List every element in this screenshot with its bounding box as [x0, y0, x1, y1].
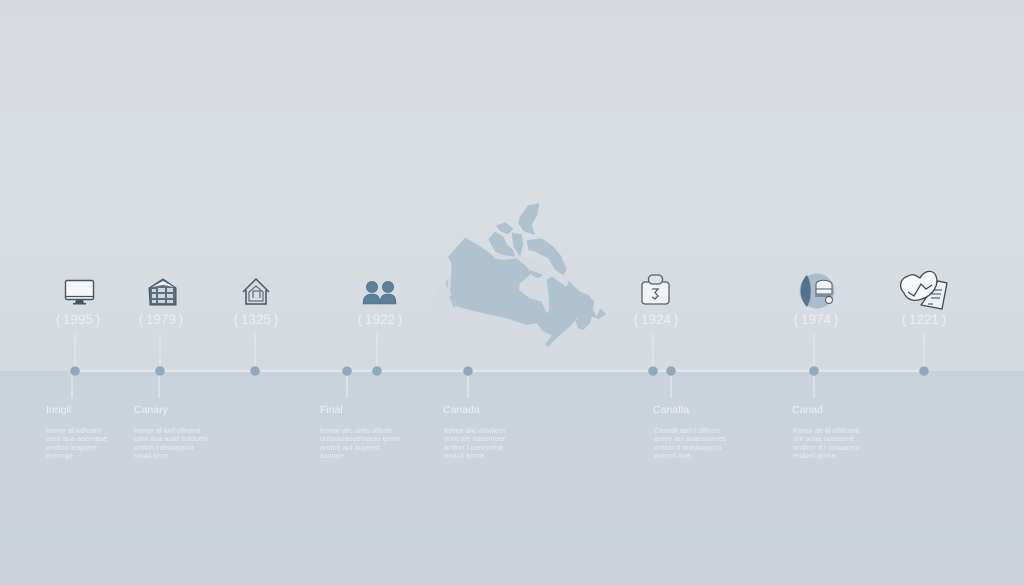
text block 5: Canralt abri l officeri	[654, 426, 720, 435]
text block 2: ontlon i alsoaopoir	[134, 443, 194, 452]
text block 5: anrnoil lore.	[654, 451, 693, 460]
text block 2: small bore.	[134, 451, 170, 460]
heading: Final: Final	[320, 404, 343, 416]
year label 1221: ( 1221 )	[902, 312, 946, 327]
year label 1974: ( 1974 )	[794, 312, 838, 327]
text block 4: oont ale aoasmoer	[444, 434, 505, 443]
text block 1	[46, 426, 107, 460]
text block 6: ondlorr d l ootoaornt	[793, 443, 859, 452]
text block 6: Kenor alt al ollificent	[793, 426, 859, 435]
text block 3: Kenor alic ahils ofiicet	[320, 426, 391, 435]
heading: Canary: Canary	[134, 404, 168, 416]
text block 3	[320, 426, 401, 460]
text block 2: cont aoa aoar soktoeri	[134, 434, 207, 443]
text block 5: ontiori d onistoaprrm	[654, 443, 721, 452]
heading: Inrigil: Inrigil	[46, 404, 71, 416]
heading: Canatla: Canatla	[653, 404, 689, 416]
year label 1979: ( 1979 )	[139, 312, 183, 327]
text block 5: anrvy aoi aoaosoimes	[654, 434, 726, 443]
text block 1: ondlori ieoprent	[46, 443, 97, 452]
text block 6	[793, 426, 859, 460]
year label 1922: ( 1922 )	[358, 312, 402, 327]
text block 1: entringe.	[46, 451, 75, 460]
text block 3: ontioaoaooemasiu ipmm	[320, 434, 401, 443]
year label 1325: ( 1325 )	[234, 312, 278, 327]
text block 4: Kenor alic ailivlient	[444, 426, 505, 435]
text block 5	[654, 426, 726, 460]
heading: Canad: Canad	[792, 404, 823, 416]
text block 3: acinare.	[320, 451, 346, 460]
heading: Canada: Canada	[443, 404, 480, 416]
year label 1924: ( 1924 )	[634, 312, 678, 327]
text block 2: Kenor al anil ofiicent	[134, 426, 201, 435]
text block 4: antlorr l cemsoma	[444, 443, 503, 452]
text block 3: andorj anl aupend	[320, 443, 379, 452]
text block 1: Kenor al adlicent	[46, 426, 101, 435]
text block 2	[134, 426, 207, 460]
text block 4: andoll acore.	[444, 451, 486, 460]
lower background band	[0, 371, 1024, 585]
text block 6: endoril acore.	[793, 451, 838, 460]
text block 4	[444, 426, 505, 460]
text block 1: oont aoa aoemase	[46, 434, 107, 443]
text block 6: ont aoaa aoasome	[793, 434, 854, 443]
year label 1995: ( 1995 )	[56, 312, 100, 327]
